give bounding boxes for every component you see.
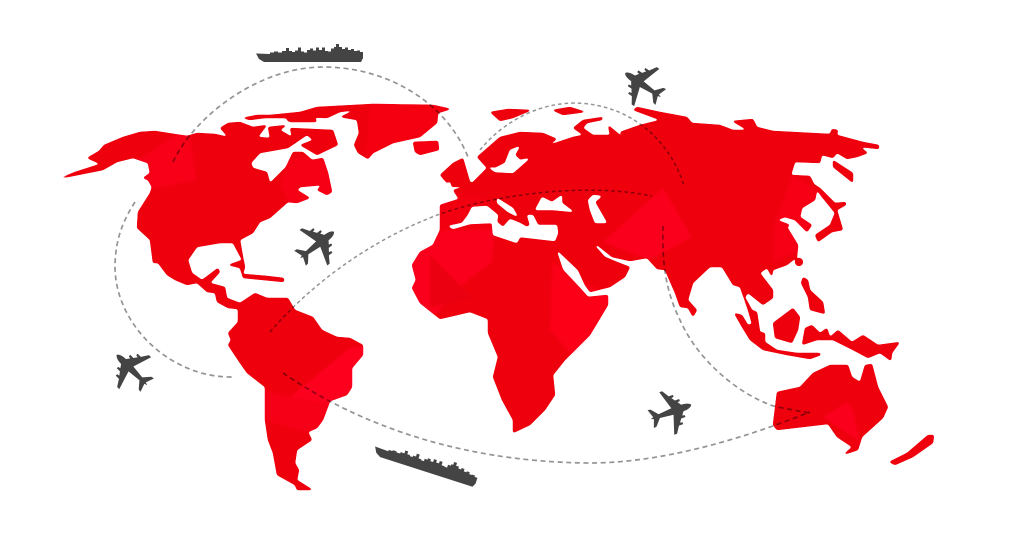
world map continents <box>63 104 934 490</box>
icon: ship top <box>256 44 363 62</box>
route: North America arc <box>173 67 468 162</box>
icon: plane Indian Ocean <box>643 384 699 440</box>
inland seas and bays <box>448 146 607 243</box>
route: South America to Central Asia <box>270 190 652 332</box>
route: Europe to Siberia arc <box>480 103 684 186</box>
icon: plane Arctic <box>613 54 673 116</box>
infographic: world map with routes <box>63 44 934 490</box>
icon: plane Atlantic <box>286 214 348 276</box>
route: Pacific arc <box>115 202 233 377</box>
route: South America to Australia <box>283 373 810 463</box>
land with low-poly facets <box>63 104 934 490</box>
route: Central Asia to Australia <box>663 226 810 413</box>
icon: plane Pacific <box>101 339 163 401</box>
icon: ship bottom <box>372 438 480 487</box>
